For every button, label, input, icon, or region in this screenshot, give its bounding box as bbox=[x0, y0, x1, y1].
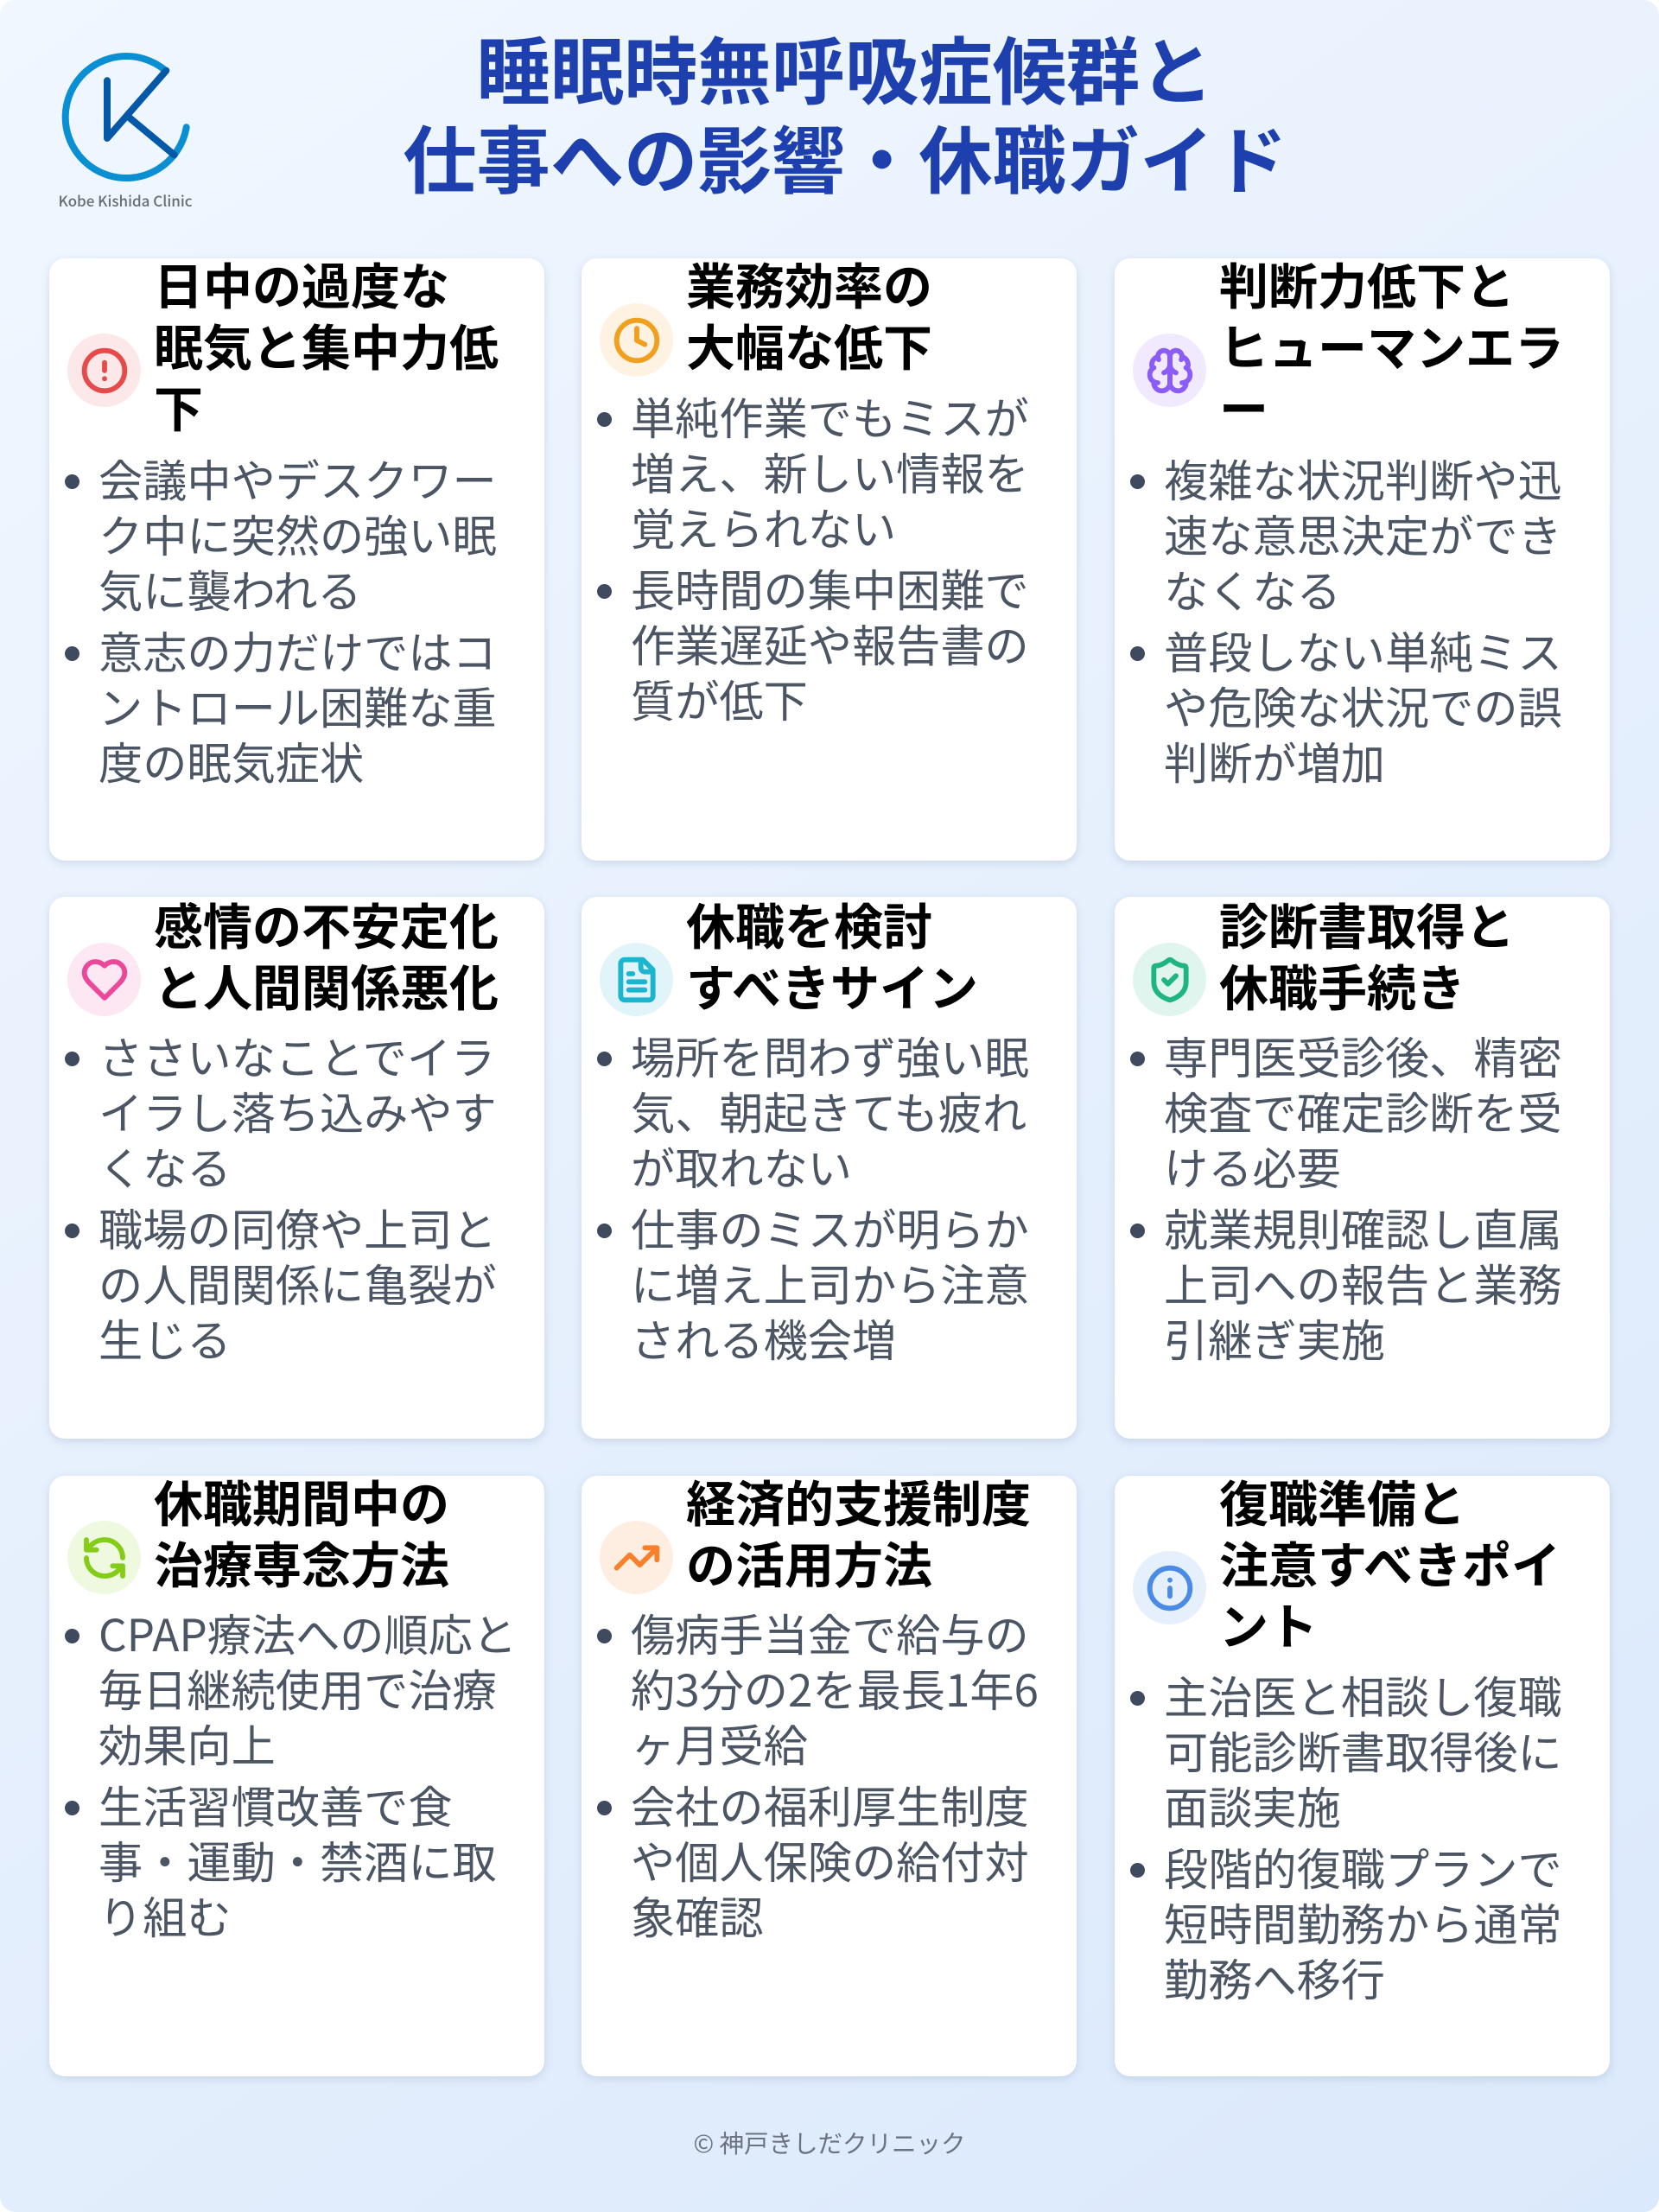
bullet list bbox=[597, 1600, 1039, 1947]
icon: heart bbox=[67, 943, 141, 1016]
bullet list: 約3分の2を最長1年6 bbox=[631, 1656, 1039, 1719]
bullet list: 気に襲われる bbox=[99, 556, 362, 620]
heading bbox=[1219, 888, 1515, 1020]
bullet list: ク中に突然の強い眠 bbox=[99, 501, 497, 565]
heading bbox=[154, 1465, 449, 1598]
bullet list: イラし落ち込みやす bbox=[99, 1078, 497, 1142]
footer: © 神戸きしだクリニック bbox=[693, 2125, 966, 2160]
bullet list: 単純作業でもミスが bbox=[631, 384, 1029, 448]
bullet list bbox=[597, 384, 1029, 730]
bullet list: や個人保険の給付対 bbox=[631, 1827, 1029, 1891]
bullet list: 象確認 bbox=[631, 1883, 764, 1947]
heading bbox=[154, 888, 499, 1020]
heading bbox=[686, 1465, 1031, 1598]
bullet list: 傷病手当金で給与の bbox=[631, 1600, 1029, 1664]
heading: 注意すべきポイ bbox=[1219, 1527, 1560, 1598]
heading: 眠気と集中力低 bbox=[154, 309, 499, 380]
heading: 診断書取得と bbox=[1219, 888, 1515, 959]
bullet list: 作業遅延や報告書の bbox=[631, 611, 1029, 675]
bullet list: 度の眠気症状 bbox=[99, 728, 364, 792]
heading bbox=[1219, 1465, 1560, 1659]
bullet list bbox=[65, 1023, 497, 1370]
logo: Kobe Kishida Clinic: Kobe Kishida Clinic bbox=[58, 189, 193, 211]
panel: signs for leave bbox=[582, 897, 1077, 1439]
panel: diagnosis and procedure bbox=[1115, 897, 1610, 1439]
bullet list: 上司への報告と業務 bbox=[1164, 1250, 1562, 1314]
bullet list: 検査で確定診断を受 bbox=[1164, 1078, 1562, 1142]
bullet list: ントロール困難な重 bbox=[99, 673, 497, 737]
icon: alert bbox=[67, 334, 141, 407]
bullet list: 仕事のミスが明らか bbox=[631, 1195, 1029, 1259]
heading bbox=[686, 888, 978, 1020]
panel: daytime sleepiness bbox=[49, 258, 544, 861]
bullet list: 速な意思決定ができ bbox=[1164, 501, 1562, 565]
bullet list: 就業規則確認し直属 bbox=[1164, 1195, 1562, 1259]
icon: clock bbox=[600, 303, 673, 377]
heading: 休職手続き bbox=[1219, 950, 1465, 1020]
panel: return to work bbox=[1115, 1476, 1610, 2076]
bullet list bbox=[597, 1023, 1029, 1370]
heading: 業務効率の bbox=[686, 248, 932, 319]
heading: ヒューマンエラ bbox=[1219, 309, 1564, 380]
bullet list: 職場の同僚や上司と bbox=[99, 1195, 497, 1259]
bullet list: 面談実施 bbox=[1164, 1773, 1341, 1837]
title bbox=[403, 13, 1287, 209]
panel: financial support bbox=[582, 1476, 1077, 2076]
bullet list: 勤務へ移行 bbox=[1164, 1945, 1385, 2009]
heading: 感情の不安定化 bbox=[154, 888, 499, 959]
bullet list: 判断が増加 bbox=[1164, 728, 1385, 792]
bullet list: や危険な状況での誤 bbox=[1164, 673, 1562, 737]
bullet list: 場所を問わず強い眠 bbox=[631, 1023, 1029, 1087]
bullet list: 生活習慣改善で食 bbox=[99, 1772, 453, 1836]
bullet list: ヶ月受給 bbox=[631, 1711, 808, 1775]
heading: ント bbox=[1219, 1588, 1318, 1659]
bullet list: 覚えられない bbox=[631, 494, 896, 558]
panel: work efficiency bbox=[582, 258, 1077, 861]
bullet list: 生じる bbox=[99, 1306, 232, 1370]
heading: 休職を検討 bbox=[686, 888, 932, 959]
title: 睡眠時無呼吸症候群と bbox=[477, 13, 1213, 120]
bullet list: 質が低下 bbox=[631, 666, 808, 730]
bullet list: 会社の福利厚生制度 bbox=[631, 1772, 1029, 1836]
bullet list: 長時間の集中困難で bbox=[631, 556, 1029, 620]
bullet list bbox=[65, 446, 497, 792]
heading: ー bbox=[1219, 371, 1268, 442]
bullet list: くなる bbox=[99, 1134, 232, 1198]
bullet list: 主治医と相談し復職 bbox=[1164, 1662, 1562, 1726]
bullet list: 複雑な状況判断や迅 bbox=[1164, 446, 1562, 510]
heading: 日中の過度な bbox=[154, 248, 449, 319]
heading: 治療専念方法 bbox=[154, 1527, 449, 1598]
panel: treatment during leave bbox=[49, 1476, 544, 2076]
bullet list: ささいなことでイラ bbox=[99, 1023, 495, 1087]
bullet list: される機会増 bbox=[631, 1306, 896, 1370]
bullet list: 普段しない単純ミス bbox=[1164, 618, 1562, 682]
bullet list: 会議中やデスクワー bbox=[99, 446, 497, 510]
bullet list: 意志の力だけではコ bbox=[99, 618, 497, 682]
bullet list: 可能診断書取得後に bbox=[1164, 1718, 1562, 1782]
icon: shield check bbox=[1133, 943, 1206, 1016]
bullet list: り組む bbox=[99, 1883, 232, 1947]
icon: refresh bbox=[67, 1521, 141, 1594]
bullet list: 事・運動・禁酒に取 bbox=[99, 1827, 497, 1891]
bullet list: なくなる bbox=[1164, 556, 1341, 620]
heading bbox=[686, 248, 932, 380]
bullet list: 毎日継続使用で治療 bbox=[99, 1656, 497, 1719]
icon: brain bbox=[1133, 334, 1206, 407]
icon: trending up bbox=[600, 1521, 673, 1594]
heading: 大幅な低下 bbox=[686, 309, 932, 380]
heading: 復職準備と bbox=[1219, 1465, 1465, 1536]
heading: すべきサイン bbox=[686, 950, 978, 1020]
bullet list: の人間関係に亀裂が bbox=[99, 1250, 497, 1314]
bullet list: 引継ぎ実施 bbox=[1164, 1306, 1385, 1370]
heading: の活用方法 bbox=[686, 1527, 932, 1598]
bullet list: 気、朝起きても疲れ bbox=[631, 1078, 1027, 1142]
bullet list bbox=[1130, 446, 1562, 792]
heading: 判断力低下と bbox=[1219, 248, 1515, 319]
bullet list: 効果向上 bbox=[99, 1711, 276, 1775]
icon: document bbox=[600, 943, 673, 1016]
bullet list: 専門医受診後、精密 bbox=[1164, 1023, 1562, 1087]
panel: judgment bbox=[1115, 258, 1610, 861]
bullet list: 増え、新しい情報を bbox=[631, 439, 1029, 503]
bullet list bbox=[1130, 1662, 1562, 2009]
icon: info bbox=[1133, 1551, 1206, 1624]
bullet list bbox=[1130, 1023, 1562, 1370]
heading: 経済的支援制度 bbox=[686, 1465, 1031, 1536]
bullet list: 短時間勤務から通常 bbox=[1164, 1890, 1562, 1954]
panel: emotions bbox=[49, 897, 544, 1439]
bullet list: に増え上司から注意 bbox=[631, 1250, 1029, 1314]
heading: 休職期間中の bbox=[154, 1465, 449, 1536]
title: 仕事への影響・休職ガイド bbox=[403, 102, 1287, 209]
logo: Kobe Kishida Clinic bbox=[58, 53, 193, 211]
heading bbox=[154, 248, 499, 442]
bullet list: CPAP療法への順応と bbox=[99, 1600, 517, 1664]
bullet list: 段階的復職プランで bbox=[1164, 1834, 1562, 1898]
heading bbox=[1219, 248, 1564, 442]
heading: と人間関係悪化 bbox=[154, 950, 499, 1020]
bullet list: が取れない bbox=[631, 1134, 852, 1198]
heading: 下 bbox=[154, 371, 203, 442]
bullet list bbox=[65, 1600, 517, 1947]
bullet list: ける必要 bbox=[1164, 1134, 1341, 1198]
